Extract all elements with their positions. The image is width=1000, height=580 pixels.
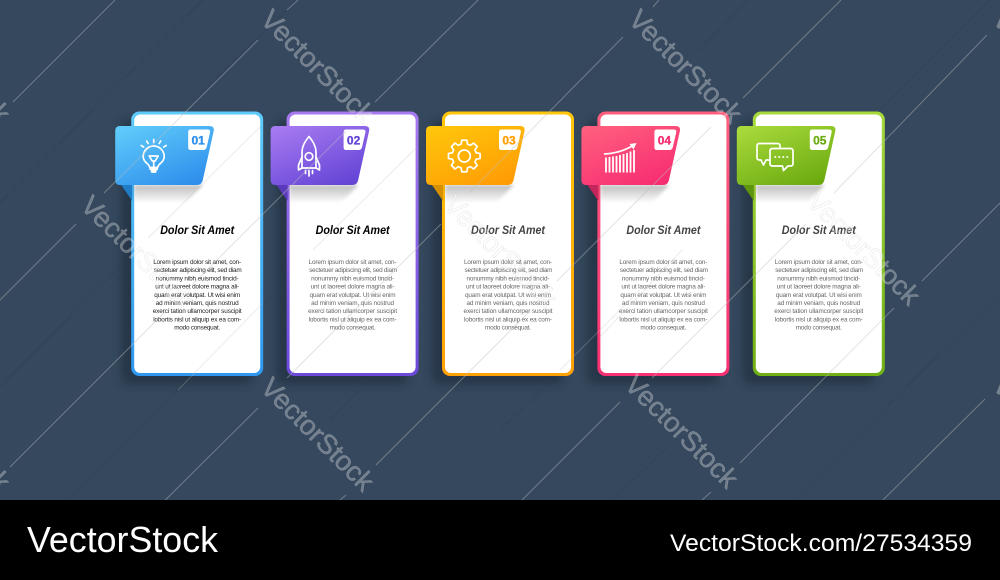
heading: Dolor Sit Amet xyxy=(160,223,235,237)
body text xyxy=(308,259,397,332)
card shadow xyxy=(432,120,563,384)
tag fold xyxy=(743,185,754,201)
tag fold xyxy=(587,185,598,201)
body text: modo consequat. xyxy=(796,325,842,332)
heading: Dolor Sit Amet xyxy=(626,223,701,237)
tag xyxy=(581,126,680,185)
tag xyxy=(115,126,214,185)
number badge xyxy=(810,130,832,150)
body text: ad minim veniam, quis nostrud xyxy=(622,300,705,307)
body text: nonummy nibh euismod tincid- xyxy=(311,275,394,282)
card frame xyxy=(442,112,574,376)
body text: Lorem ipsum dolor sit amet, con- xyxy=(153,259,241,266)
body text: unt ut laoreet dolore magna ali- xyxy=(777,284,861,291)
body text: Lorem ipsum dolor sit amet, con- xyxy=(309,259,397,266)
number badge: 05 xyxy=(813,133,827,147)
body text: unt ut laoreet dolore magna ali- xyxy=(466,284,550,291)
tag fold xyxy=(121,185,132,201)
panel: card 3 xyxy=(426,112,574,384)
card inner xyxy=(756,114,882,373)
card shadow xyxy=(587,120,718,384)
watermarks: VectorStock xyxy=(75,189,201,315)
tag fold xyxy=(432,185,443,201)
card frame xyxy=(287,112,419,376)
body text: nonummy nibh euismod tincid- xyxy=(622,275,705,282)
body text: modo consequat. xyxy=(640,325,687,332)
icon: rocket xyxy=(298,136,320,176)
tag shadow xyxy=(445,185,514,203)
body text: quam erat volutpat. Ut wisi enim xyxy=(776,292,862,299)
icon: chat bubbles xyxy=(757,144,793,170)
card shadow xyxy=(121,120,252,384)
body text: lobortis nisl ut aliquip ex ea com- xyxy=(464,316,552,323)
body text: modo consequat. xyxy=(174,325,220,332)
panel: card 1 xyxy=(115,112,263,384)
watermarks: VectorStock xyxy=(255,3,381,129)
tag xyxy=(426,126,525,185)
body text: unt ut laoreet dolore magna ali- xyxy=(155,284,239,291)
body text: quam erat volutpat. Ut wisi enim xyxy=(154,292,240,299)
body text xyxy=(464,259,553,332)
number badge: 03 xyxy=(502,133,516,147)
body text: Lorem ipsum dolor sit amet, con- xyxy=(464,259,552,266)
body text: ad minim veniam, quis nostrud xyxy=(311,300,395,307)
body text: unt ut laoreet dolore magna ali- xyxy=(311,284,395,291)
body text: ad minim veniam, quis nostrud xyxy=(156,300,239,307)
card frame xyxy=(597,112,729,376)
body text: modo consequat. xyxy=(485,325,531,332)
number badge xyxy=(654,130,676,150)
body text: lobortis nisl ut aliquip ex ea com- xyxy=(775,316,863,323)
body text: lobortis nisl ut aliquip ex ea com- xyxy=(153,316,241,323)
card shadow xyxy=(277,120,408,384)
body text: unt ut laoreet dolore magna ali- xyxy=(621,284,705,291)
watermarks: VectorStock xyxy=(438,188,564,314)
card inner xyxy=(445,114,571,373)
watermarks: VectorStock xyxy=(801,185,927,311)
footer logo: VectorStock xyxy=(27,519,219,560)
body text xyxy=(619,259,708,332)
tag xyxy=(737,126,835,185)
tag shadow xyxy=(134,185,203,203)
icon: gear xyxy=(448,140,480,172)
tag xyxy=(271,126,369,185)
card inner xyxy=(290,114,416,373)
number badge: 02 xyxy=(347,133,361,147)
body text: lobortis nisl ut aliquip ex ea com- xyxy=(619,316,707,323)
heading: Dolor Sit Amet xyxy=(471,223,546,237)
body text: sectetuer adipiscing elit, sed diam xyxy=(775,267,863,274)
body text: Lorem ipsum dolor sit amet, con- xyxy=(619,259,707,266)
number badge xyxy=(499,130,521,150)
heading: Dolor Sit Amet xyxy=(782,223,857,237)
body text: quam erat volutpat. Ut wisi enim xyxy=(620,292,706,299)
heading: Dolor Sit Amet xyxy=(316,223,390,237)
card frame xyxy=(131,112,263,376)
tag shadow xyxy=(290,185,359,203)
body text: ad minim veniam, quis nostrud xyxy=(466,300,550,307)
number badge: 04 xyxy=(658,133,671,147)
body text xyxy=(153,259,242,332)
body text: sectetuer adipiscing elit, sed diam xyxy=(309,267,397,274)
footer image id: VectorStock.com/27534359 xyxy=(670,530,972,557)
body text: exerci tation ullamcorper suscipit xyxy=(774,308,864,315)
tag fold xyxy=(277,185,288,201)
body text: exerci tation ullamcorper suscipit xyxy=(153,308,242,315)
number badge xyxy=(188,130,210,150)
body text xyxy=(774,259,864,332)
panel: card 5 xyxy=(737,112,885,384)
body text: lobortis nisl ut aliquip ex ea com- xyxy=(309,316,397,323)
body text: nonummy nibh euismod tincid- xyxy=(777,275,860,282)
body text: exerci tation ullamcorper suscipit xyxy=(308,308,397,315)
body text: sectetuer adipiscing elit, sed diam xyxy=(464,267,552,274)
body text: sectetuer adipiscing elit, sed diam xyxy=(620,267,708,274)
body text: exerci tation ullamcorper suscipit xyxy=(619,308,708,315)
body text: ad minim veniam, quis nostrud xyxy=(777,300,861,307)
body text: quam erat volutpat. Ut wisi enim xyxy=(465,292,551,299)
panel: card 2 xyxy=(271,112,419,384)
footer band xyxy=(0,500,1000,580)
icon: growth chart xyxy=(604,143,636,172)
body text: nonummy nibh euismod tincid- xyxy=(156,275,239,282)
body text: modo consequat. xyxy=(330,325,376,332)
icon: light bulb xyxy=(141,140,166,172)
number badge: 01 xyxy=(192,133,205,147)
body text: nonummy nibh euismod tincid- xyxy=(466,275,550,282)
watermarks: VectorStock xyxy=(623,3,749,129)
watermarks: VectorStock xyxy=(255,371,381,497)
body text: exerci tation ullamcorper suscipit xyxy=(464,308,553,315)
card shadow xyxy=(743,120,874,384)
tag shadow xyxy=(600,185,669,203)
number badge xyxy=(344,130,366,150)
body text: Lorem ipsum dolor sit amet, con- xyxy=(775,259,863,266)
body text: quam erat volutpat. Ut wisi enim xyxy=(310,292,396,299)
card inner xyxy=(600,114,726,373)
body text: sectetuer adipiscing elit, sed diam xyxy=(154,267,242,274)
panel: card 4 xyxy=(581,112,729,384)
tag shadow xyxy=(756,185,825,203)
watermarks: VectorStock xyxy=(619,368,745,494)
card inner xyxy=(134,114,260,373)
card frame xyxy=(753,112,885,376)
